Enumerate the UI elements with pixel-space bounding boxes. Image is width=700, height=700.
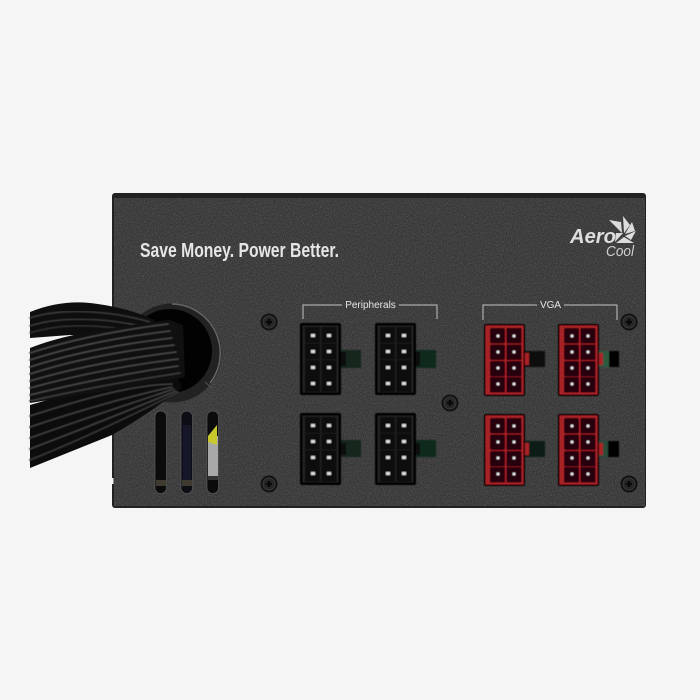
screw top right [620,314,638,330]
connector: peripherals 4 [375,413,436,485]
screw bottom right [620,476,638,492]
connector: VGA 4 [558,414,619,486]
panel: power supply body [112,193,646,508]
label: VGA bracket [483,300,617,320]
logo icon: star [609,216,636,243]
cable bundle: main [30,320,185,403]
screw center [442,394,458,412]
connector: VGA 1 [484,324,545,396]
screw bottom left [260,476,278,492]
logo wordmark: Aero: Aero [569,226,616,248]
connector: peripherals 2 [375,323,436,395]
label: Peripherals bracket: Peripherals [345,300,396,311]
icon: cable grommet [122,304,222,402]
connector: peripherals 1 [300,323,361,395]
connector: VGA 2 [558,324,619,396]
cable bundle: top [30,302,155,338]
icon: ventilation slots [155,411,218,494]
slot 3 [207,411,218,494]
connector: peripherals 3 [300,413,361,485]
connector: VGA 3 [484,414,545,486]
slot 2 [181,411,192,494]
label: Peripherals bracket [303,300,437,319]
cables [30,302,185,468]
logo: AeroCool [569,216,636,260]
logo wordmark: Cool: Cool [606,244,635,260]
text: slogan: Save Money. Power Better. [140,239,339,262]
screw top left [260,314,278,330]
label: VGA bracket: VGA [540,300,561,311]
slot 1 [155,411,166,494]
cable bundle: lower [30,378,182,468]
icon: screws [260,314,638,492]
